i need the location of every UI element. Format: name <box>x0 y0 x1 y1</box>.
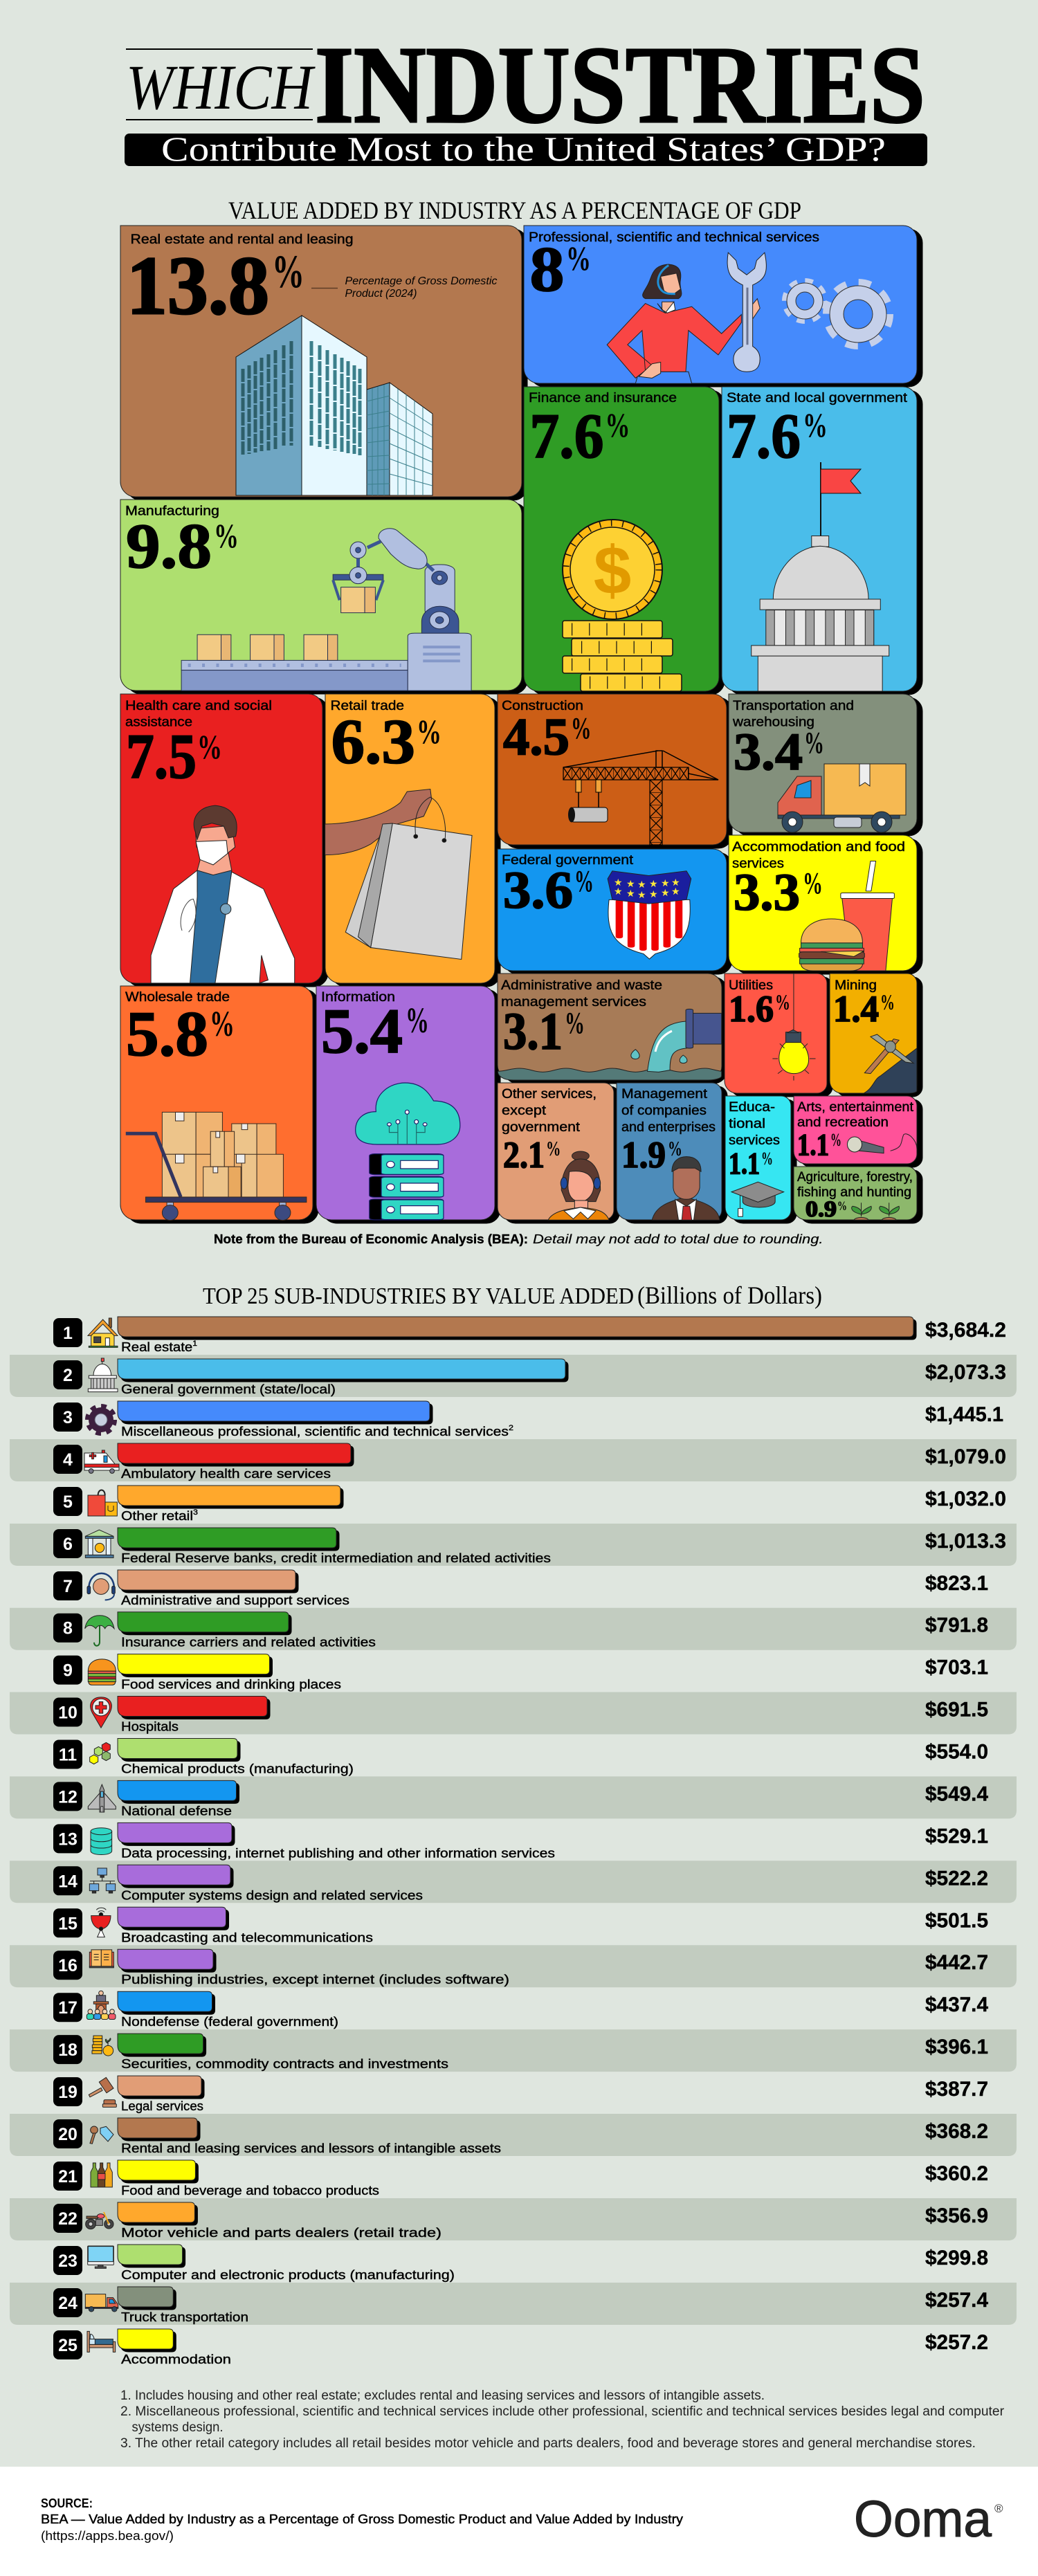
panel: wholesale trade: % <box>210 1005 235 1044</box>
panel: manufacturing: Manufacturing <box>125 504 219 519</box>
row 5 <box>53 1486 1006 1523</box>
icon: light bulb <box>772 974 816 1081</box>
row 25: 25 <box>58 2336 78 2355</box>
panel: manufacturing <box>120 500 522 691</box>
panel: transportation <box>729 694 917 832</box>
panel: wholesale trade: 5.8 <box>126 998 208 1069</box>
row 23: $299.8 <box>925 2247 988 2269</box>
panel: transportation: % <box>804 726 824 760</box>
panel: state and local government: % <box>803 405 828 444</box>
panel: real estate: Real estate and rental and leasing <box>130 232 354 247</box>
panel: construction: % <box>571 711 591 745</box>
row 23 <box>53 2245 988 2282</box>
panel: wholesale trade <box>120 986 313 1221</box>
panel: retail trade: 6.3 <box>331 706 415 776</box>
panel: administrative and waste: management services <box>501 995 646 1010</box>
row 15: Broadcasting and telecommunications <box>121 1930 373 1944</box>
note: Note from the Bureau of Economic Analysis (BEA): <box>214 1232 528 1246</box>
panel: federal government: % <box>574 864 594 898</box>
row 12 <box>10 1776 1017 1818</box>
footnotes: 3. The other retail category includes all retail besides motor vehicle and parts dealers, food and beverage stores and general merchandise stores. <box>120 2436 976 2451</box>
row 20 <box>10 2114 1017 2156</box>
row 6: 6 <box>63 1535 73 1554</box>
row 4: 4 <box>63 1450 73 1470</box>
icon: database <box>91 1828 112 1855</box>
heading: value added: VALUE ADDED BY INDUSTRY AS A PERCENTAGE OF GDP <box>228 197 801 224</box>
panel: educational services: 1.1 <box>729 1147 760 1180</box>
panel: other services: Other services, <box>502 1087 597 1102</box>
panel: administrative and waste: Administrative and waste <box>501 978 662 993</box>
icon: doctor with mask <box>151 805 295 983</box>
logo: Ooma: Ooma <box>854 2490 992 2548</box>
footnotes <box>120 2388 1005 2451</box>
panel: management of companies: % <box>668 1136 682 1160</box>
panel: educational services: services <box>729 1133 780 1148</box>
panel: state and local government <box>722 387 917 691</box>
icon: capitol <box>88 1358 118 1392</box>
row 2: 2 <box>63 1366 73 1385</box>
icon: shield with stars and stripes: ★ <box>637 890 646 901</box>
row 17: Nondefense (federal government) <box>121 2014 338 2029</box>
panel: federal government: 3.6 <box>503 861 573 920</box>
panel: arts and entertainment: Arts, entertainment <box>797 1100 914 1115</box>
source: SOURCE: <box>41 2496 93 2510</box>
icon: shield with stars and stripes: ★ <box>614 877 623 888</box>
panel: professional services: Professional, scientific and technical services <box>529 230 819 245</box>
panel: accommodation and food: Accommodation and food <box>732 840 905 855</box>
row 22: Motor vehicle and parts dealers (retail trade) <box>121 2225 441 2240</box>
panel: finance and insurance: 7.6 <box>530 401 603 471</box>
row 14: $522.2 <box>925 1867 988 1890</box>
row 9: Food services and drinking places <box>121 1677 341 1692</box>
row 15: $501.5 <box>925 1909 988 1932</box>
source: (https://apps.bea.gov/) <box>41 2528 174 2543</box>
panel: accommodation and food: % <box>803 866 823 900</box>
icon: motorcycle <box>86 2212 113 2229</box>
title: INDUSTRIES <box>315 24 925 146</box>
row 4: $1,079.0 <box>925 1445 1006 1468</box>
icon: pickaxe and rock <box>864 1034 917 1093</box>
panel: information <box>316 986 495 1220</box>
panel: transportation: Transportation and <box>733 699 854 713</box>
row 3: Miscellaneous professional, scientific and technical services <box>121 1424 461 1438</box>
panel: information: Information <box>321 990 395 1005</box>
icon: sprouts <box>852 1203 899 1220</box>
row 23: Computer and electronic products (manufacturing) <box>121 2267 455 2282</box>
panel: arts and entertainment: 1.1 <box>797 1128 829 1162</box>
row 11 <box>53 1738 988 1775</box>
panel: arts and entertainment: % <box>830 1130 841 1150</box>
row 24: $257.4 <box>925 2289 988 2312</box>
panel: health care: Health care and social <box>125 699 272 713</box>
row 8: $791.8 <box>925 1614 988 1637</box>
row 6: $1,013.3 <box>925 1530 1006 1553</box>
icon: shield with stars and stripes: ★ <box>649 889 658 900</box>
panel: mining: Mining <box>835 978 877 993</box>
panel: administrative and waste: % <box>565 1006 585 1040</box>
panel: agriculture: Agriculture, forestry, <box>797 1170 913 1185</box>
row 18: Securities, commodity contracts and investments <box>121 2056 448 2071</box>
row 24 <box>10 2283 1017 2325</box>
row 2: $2,073.3 <box>925 1361 1006 1384</box>
row 19: $387.7 <box>925 2078 988 2101</box>
panel: administrative and waste <box>498 974 722 1080</box>
panel: other services: except <box>502 1104 547 1118</box>
icon: hand cart with boxes <box>126 1112 307 1221</box>
panel: arts and entertainment <box>794 1096 917 1164</box>
row 25 <box>53 2329 988 2366</box>
panel: federal government <box>498 849 727 971</box>
row 10: $691.5 <box>925 1698 988 1721</box>
row 18: $396.1 <box>925 2036 988 2058</box>
row 1 <box>53 1317 1006 1354</box>
row 19: Legal services <box>121 2099 203 2113</box>
icon: umbrella <box>85 1616 114 1646</box>
row 19 <box>53 2076 988 2113</box>
row 21: Food and beverage and tobacco products <box>121 2183 379 2198</box>
panel: educational services <box>725 1096 791 1220</box>
panel: agriculture <box>794 1167 917 1222</box>
row 25: $257.2 <box>925 2331 988 2354</box>
panel: accommodation and food: 3.3 <box>734 864 800 922</box>
row 18: 18 <box>58 2040 78 2060</box>
icon: shield with stars and stripes: ★ <box>614 886 623 897</box>
row 14 <box>10 1861 1017 1903</box>
row 11: 11 <box>59 1745 77 1764</box>
panel: mining: % <box>880 989 895 1014</box>
row 21: $360.2 <box>925 2162 988 2185</box>
row 13: 13 <box>58 1829 78 1849</box>
logo: Ooma: ® <box>994 2502 1003 2515</box>
row 19: 19 <box>58 2083 78 2102</box>
icon: hand holding shopping bag <box>325 789 472 959</box>
row 10 <box>10 1692 1017 1734</box>
panel: accommodation and food <box>729 835 917 971</box>
row 6: Federal Reserve banks, credit intermediation and related activities <box>121 1551 551 1565</box>
icon: podium and audience <box>86 1991 116 2020</box>
icon: shield with stars and stripes: ★ <box>671 886 680 897</box>
row 3: 3 <box>63 1408 73 1427</box>
row 7: $823.1 <box>925 1572 988 1595</box>
row 23: 23 <box>58 2251 78 2271</box>
icon: man in suit <box>652 1157 720 1220</box>
panel: health care: % <box>197 727 222 766</box>
source <box>41 2496 684 2543</box>
icon: truck <box>85 2294 118 2312</box>
footnotes: 1. Includes housing and other real estate; excludes rental and leasing services and lessors of intangible assets. <box>120 2388 765 2403</box>
row 2: General government (state/local) <box>121 1382 336 1396</box>
icon: burger and drink <box>799 861 894 971</box>
row 20: $368.2 <box>925 2120 988 2143</box>
row 21: 21 <box>58 2167 78 2186</box>
row 5: 3 <box>193 1508 198 1517</box>
row 9: 9 <box>63 1661 73 1681</box>
panel: real estate: Product (2024) <box>345 288 417 300</box>
panel: retail trade: Retail trade <box>331 699 404 713</box>
row 8: Insurance carriers and related activities <box>121 1635 376 1650</box>
panel: health care: 7.5 <box>126 721 197 792</box>
panel: retail trade: % <box>417 712 441 751</box>
row 22 <box>10 2198 1017 2240</box>
panel: other services: 2.1 <box>503 1134 545 1176</box>
panel: health care: assistance <box>125 715 192 729</box>
panel: construction <box>498 694 727 845</box>
row 22: $356.9 <box>925 2204 988 2227</box>
icon: satellite dish <box>91 1908 111 1937</box>
footnotes: systems design. <box>131 2420 223 2435</box>
icon: office buildings <box>236 316 432 495</box>
panel: transportation: 3.4 <box>734 723 803 781</box>
row 14: Computer systems design and related services <box>121 1888 423 1902</box>
panel: information: 5.4 <box>321 996 403 1066</box>
row 17 <box>53 1991 988 2029</box>
panel: real estate <box>120 226 522 497</box>
panel: finance and insurance: % <box>605 405 630 444</box>
icon: burger <box>88 1659 116 1685</box>
icon: graduation cap <box>731 1182 784 1216</box>
panel: management of companies: 1.9 <box>621 1134 666 1176</box>
icon: shield with stars and stripes: ★ <box>649 879 658 890</box>
row 1: 1 <box>192 1340 197 1348</box>
row 16: 16 <box>58 1956 78 1975</box>
row 7: 7 <box>63 1577 73 1596</box>
panel: real estate: 13.8 <box>127 239 269 331</box>
panel: utilities <box>725 974 827 1093</box>
row 12: $549.4 <box>925 1782 988 1805</box>
icon: monitor <box>88 2246 113 2268</box>
icon: shield with stars and stripes: ★ <box>671 877 680 888</box>
icon: gold coin and stack <box>563 520 682 691</box>
icon: shield with stars and stripes: ★ <box>661 878 670 889</box>
row 21 <box>53 2160 988 2198</box>
panel: retail trade <box>325 694 495 983</box>
row 3: $1,445.1 <box>925 1403 1003 1426</box>
icon: key and tag <box>90 2126 113 2144</box>
row 1: $3,684.2 <box>925 1319 1006 1342</box>
row 15: 15 <box>58 1914 78 1933</box>
panel: state and local government: State and local government <box>727 391 908 405</box>
row 12: National defense <box>121 1803 232 1818</box>
panel: construction: Construction <box>502 699 583 713</box>
row 13 <box>53 1823 988 1860</box>
row 1: Real estate <box>121 1340 186 1354</box>
row 10: 10 <box>58 1703 78 1723</box>
row 24: 24 <box>58 2294 78 2313</box>
icon: ambulance <box>84 1450 119 1473</box>
icon: shield with stars and stripes: ★ <box>626 879 635 890</box>
icon: robot arm conveyor <box>181 529 471 691</box>
panel: finance and insurance <box>524 387 719 691</box>
icon: open book <box>89 1950 113 1968</box>
panel: manufacturing: % <box>214 516 239 555</box>
row 3 <box>53 1401 1003 1438</box>
row 13: $529.1 <box>925 1825 988 1847</box>
footer <box>0 2467 1038 2576</box>
panel: agriculture: 0.9 <box>805 1197 837 1222</box>
icon: capitol dome with flag <box>752 462 889 691</box>
panel: finance and insurance: Finance and insurance <box>529 391 677 405</box>
icon: tower crane <box>563 751 718 845</box>
row 25: Accommodation <box>121 2352 231 2366</box>
icon: waste pipe <box>498 1009 722 1080</box>
icon: cloud and servers <box>356 1083 460 1220</box>
row 16 <box>10 1945 1017 1987</box>
row 5: Other retail <box>121 1508 185 1523</box>
icon: gear <box>87 1406 115 1434</box>
icon: shield with stars and stripes <box>608 871 691 959</box>
row 24: Truck transportation <box>121 2310 248 2324</box>
icon: coins and money plant <box>92 2036 113 2056</box>
row 11: $554.0 <box>925 1741 988 1763</box>
row 13: Data processing, internet publishing and other information services <box>121 1845 555 1860</box>
panel: other services: % <box>546 1136 561 1160</box>
icon: shopping bags <box>88 1490 117 1516</box>
note: italic part: Detail may not add to total due to rounding. <box>533 1232 823 1246</box>
icon: fighter jet <box>88 1784 116 1812</box>
panel: construction: 4.5 <box>503 709 570 767</box>
panel: agriculture: % <box>837 1199 847 1214</box>
panel: other services: government <box>502 1120 581 1135</box>
panel: educational services: % <box>761 1149 773 1169</box>
panel: management of companies: and enterprises <box>621 1120 716 1135</box>
panel: manufacturing: 9.8 <box>126 511 212 581</box>
row 12: 12 <box>58 1787 78 1807</box>
panel: mining: 1.4 <box>833 988 879 1030</box>
panel: utilities: Utilities <box>729 978 773 993</box>
panel: state and local government: 7.6 <box>727 401 801 471</box>
heading: top 25: (Billions of Dollars) <box>637 1281 822 1309</box>
row 17: 17 <box>58 1998 78 2018</box>
row 6 <box>10 1524 1017 1566</box>
panel: professional services <box>524 226 917 383</box>
footnotes: 2. Miscellaneous professional, scientific and technical services include other professional, scientific and technical services besides legal and computer <box>120 2404 1005 2419</box>
icon: headset <box>87 1573 115 1600</box>
panel: arts and entertainment: and recreation <box>797 1115 889 1130</box>
panel: mining <box>830 974 917 1093</box>
panel: real estate: Percentage of Gross Domestic <box>345 275 498 287</box>
icon: bottles <box>91 2163 112 2187</box>
icon: shield with stars and stripes: ★ <box>626 888 635 899</box>
row 4 <box>10 1439 1017 1481</box>
row 2 <box>10 1355 1017 1397</box>
panel: administrative and waste: 3.1 <box>503 1003 563 1061</box>
row 18 <box>10 2029 1017 2072</box>
icon: delivery truck <box>778 764 906 832</box>
panel: health care <box>120 694 322 983</box>
title: WHICH <box>126 52 316 122</box>
row 5: $1,032.0 <box>925 1488 1006 1510</box>
panel: real estate: % <box>272 245 304 298</box>
panel: professional services: % <box>566 239 591 277</box>
panel: management of companies: Management <box>621 1087 708 1102</box>
row 7: Administrative and support services <box>121 1593 349 1607</box>
heading: top 25: TOP 25 SUB-INDUSTRIES BY VALUE ADDED <box>203 1284 634 1309</box>
icon: chemical hexagons <box>90 1742 110 1764</box>
panel: utilities: 1.6 <box>729 988 774 1030</box>
panel: transportation: warehousing <box>732 715 814 729</box>
icon: woman with headset <box>548 1151 609 1220</box>
panel: accommodation and food: services <box>732 857 784 871</box>
icon: hospital pin <box>91 1697 111 1728</box>
row 4: Ambulatory health care services <box>121 1466 331 1481</box>
row 7 <box>53 1570 988 1607</box>
row 10: Hospitals <box>121 1719 179 1734</box>
row 8 <box>10 1608 1017 1650</box>
row 16: Publishing industries, except internet (includes software) <box>121 1972 509 1986</box>
panel: educational services: tional <box>729 1117 765 1131</box>
panel: agriculture: fishing and hunting <box>797 1185 911 1200</box>
row 8: 8 <box>63 1619 73 1638</box>
panel: utilities: % <box>775 989 790 1014</box>
panel: management of companies <box>617 1083 722 1220</box>
icon: gold coin and stack: $ <box>594 532 631 608</box>
icon: shield with stars and stripes: ★ <box>661 888 670 899</box>
panel: management of companies: of companies <box>621 1104 707 1118</box>
panel: other services <box>498 1083 614 1220</box>
panel: wholesale trade: Wholesale trade <box>125 990 230 1005</box>
icon: microphone <box>847 1134 917 1153</box>
row 1: 1 <box>63 1324 73 1343</box>
row 20: 20 <box>58 2125 78 2144</box>
bar chart: top 25 sub-industries <box>10 1317 1017 2366</box>
row 9 <box>53 1654 988 1692</box>
icon: bed <box>87 2331 116 2352</box>
row 20: Rental and leasing services and lessors of intangible assets <box>121 2141 501 2155</box>
row 11: Chemical products (manufacturing) <box>121 1762 354 1775</box>
row 16: $442.7 <box>925 1951 988 1974</box>
icon: shield with stars and stripes: ★ <box>637 879 646 890</box>
icon: bank <box>85 1530 113 1558</box>
subtitle bar: Contribute Most to the United States’ GDP? <box>161 129 886 168</box>
icon: gavel <box>89 2077 116 2107</box>
source: BEA — Value Added by Industry as a Percentage of Gross Domestic Product and Value Added by Industry <box>41 2512 684 2526</box>
icon: house <box>88 1318 118 1347</box>
row 22: 22 <box>58 2209 78 2229</box>
row 17: $437.4 <box>925 1993 988 2016</box>
panel: information: % <box>406 1001 429 1041</box>
row 9: $703.1 <box>925 1656 988 1679</box>
row 15 <box>53 1907 988 1944</box>
row 3: 2 <box>509 1424 513 1432</box>
icon: networked computers <box>89 1868 116 1893</box>
panel: federal government: Federal government <box>502 853 634 868</box>
row 5: 5 <box>63 1492 73 1512</box>
icon: person with wrench and gears <box>607 253 889 383</box>
row 14: 14 <box>58 1872 78 1891</box>
panel: professional services: 8 <box>530 234 565 304</box>
panel: educational services: Educa- <box>729 1100 775 1115</box>
